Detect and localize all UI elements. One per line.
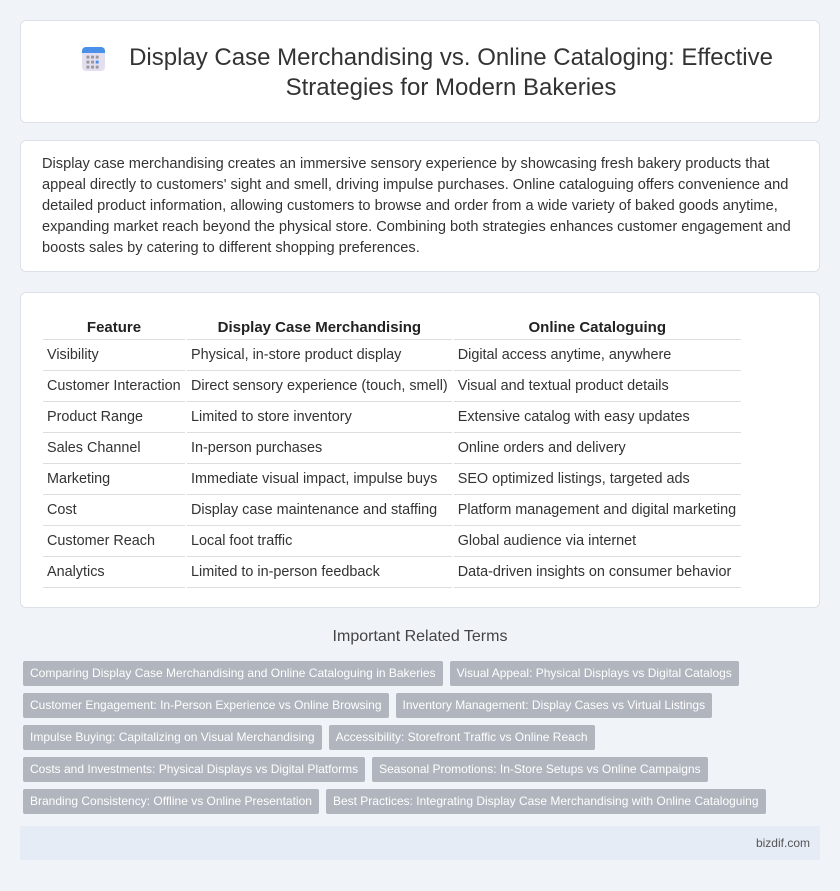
comparison table: Digital access anytime, anywhere — [458, 347, 671, 363]
comparison table: Local foot traffic — [191, 533, 292, 549]
comparison table: Visual and textual product details — [458, 378, 669, 394]
related terms tags: Seasonal Promotions: In-Store Setups vs Online Campaigns — [379, 762, 701, 776]
icon: calendar: ■■■ — [86, 60, 100, 66]
comparison table: Limited to in-person feedback — [191, 564, 380, 580]
comparison table: Global audience via internet — [458, 533, 636, 549]
related terms tags: Best Practices: Integrating Display Case Merchandising with Online Cataloguing — [333, 794, 758, 808]
comparison table: Customer Interaction — [47, 378, 181, 394]
related terms tags: Customer Engagement: In-Person Experience vs Online Browsing — [30, 698, 382, 712]
comparison table: Limited to store inventory — [191, 409, 352, 425]
comparison table panel — [20, 292, 820, 608]
comparison table: In-person purchases — [191, 440, 322, 456]
comparison table: Physical, in-store product display — [191, 347, 401, 363]
related terms tags: Comparing Display Case Merchandising and Online Cataloguing in Bakeries — [30, 666, 436, 680]
related terms tags: Branding Consistency: Offline vs Online Presentation — [30, 794, 312, 808]
comparison table: Display case maintenance and staffing — [191, 502, 437, 518]
title: Display Case Merchandising vs. Online Cataloging: Effective Strategies for Modern Bakeries — [129, 44, 773, 101]
comparison table: Immediate visual impact, impulse buys — [191, 471, 437, 487]
comparison table: Visibility — [47, 347, 99, 363]
comparison table: Feature — [87, 318, 141, 336]
comparison table: Analytics — [47, 564, 105, 580]
related terms tags: Visual Appeal: Physical Displays vs Digital Catalogs — [457, 666, 732, 680]
comparison table: SEO optimized listings, targeted ads — [458, 471, 690, 487]
comparison table: Data-driven insights on consumer behavior — [458, 564, 731, 580]
footer — [20, 826, 820, 860]
icon: calendar: ■■■ — [86, 55, 100, 61]
footer: bizdif.com — [756, 836, 810, 850]
related terms tags: Costs and Investments: Physical Displays vs Digital Platforms — [30, 762, 358, 776]
comparison table: Online Cataloguing — [528, 318, 666, 336]
header card — [20, 20, 820, 123]
comparison table: Platform management and digital marketing — [458, 502, 736, 518]
comparison table: Display Case Merchandising — [218, 318, 421, 336]
comparison table: Sales Channel — [47, 440, 141, 456]
icon: calendar — [82, 47, 105, 71]
comparison table — [43, 318, 741, 588]
related terms tags — [23, 661, 766, 814]
comparison table: Marketing — [47, 471, 110, 487]
comparison table: Customer Reach — [47, 533, 155, 549]
comparison table: Online orders and delivery — [458, 440, 626, 456]
intro text: Display case merchandising creates an immersive sensory experience by showcasing fresh bakery products that appeal directly to customers' sight and smell, driving impulse purchases. Online cataloguing offers convenience and detailed product information, allowing customers to browse and order from a wide variety of baked goods anytime, expanding market reach beyond the physical store. Combining both strategies enhances customer engagement and boosts sales by catering to different shopping preferences. — [42, 156, 791, 256]
related terms tags: Impulse Buying: Capitalizing on Visual Merchandising — [30, 730, 315, 744]
comparison table: Cost — [47, 502, 77, 518]
related terms heading: Important Related Terms — [333, 628, 507, 645]
comparison table: Extensive catalog with easy updates — [458, 409, 690, 425]
related terms tags: Accessibility: Storefront Traffic vs Online Reach — [336, 730, 588, 744]
comparison table: Direct sensory experience (touch, smell) — [191, 378, 448, 394]
icon: calendar: ■■■ — [86, 65, 100, 71]
comparison table: Product Range — [47, 409, 143, 425]
related terms tags: Inventory Management: Display Cases vs Virtual Listings — [403, 698, 705, 712]
